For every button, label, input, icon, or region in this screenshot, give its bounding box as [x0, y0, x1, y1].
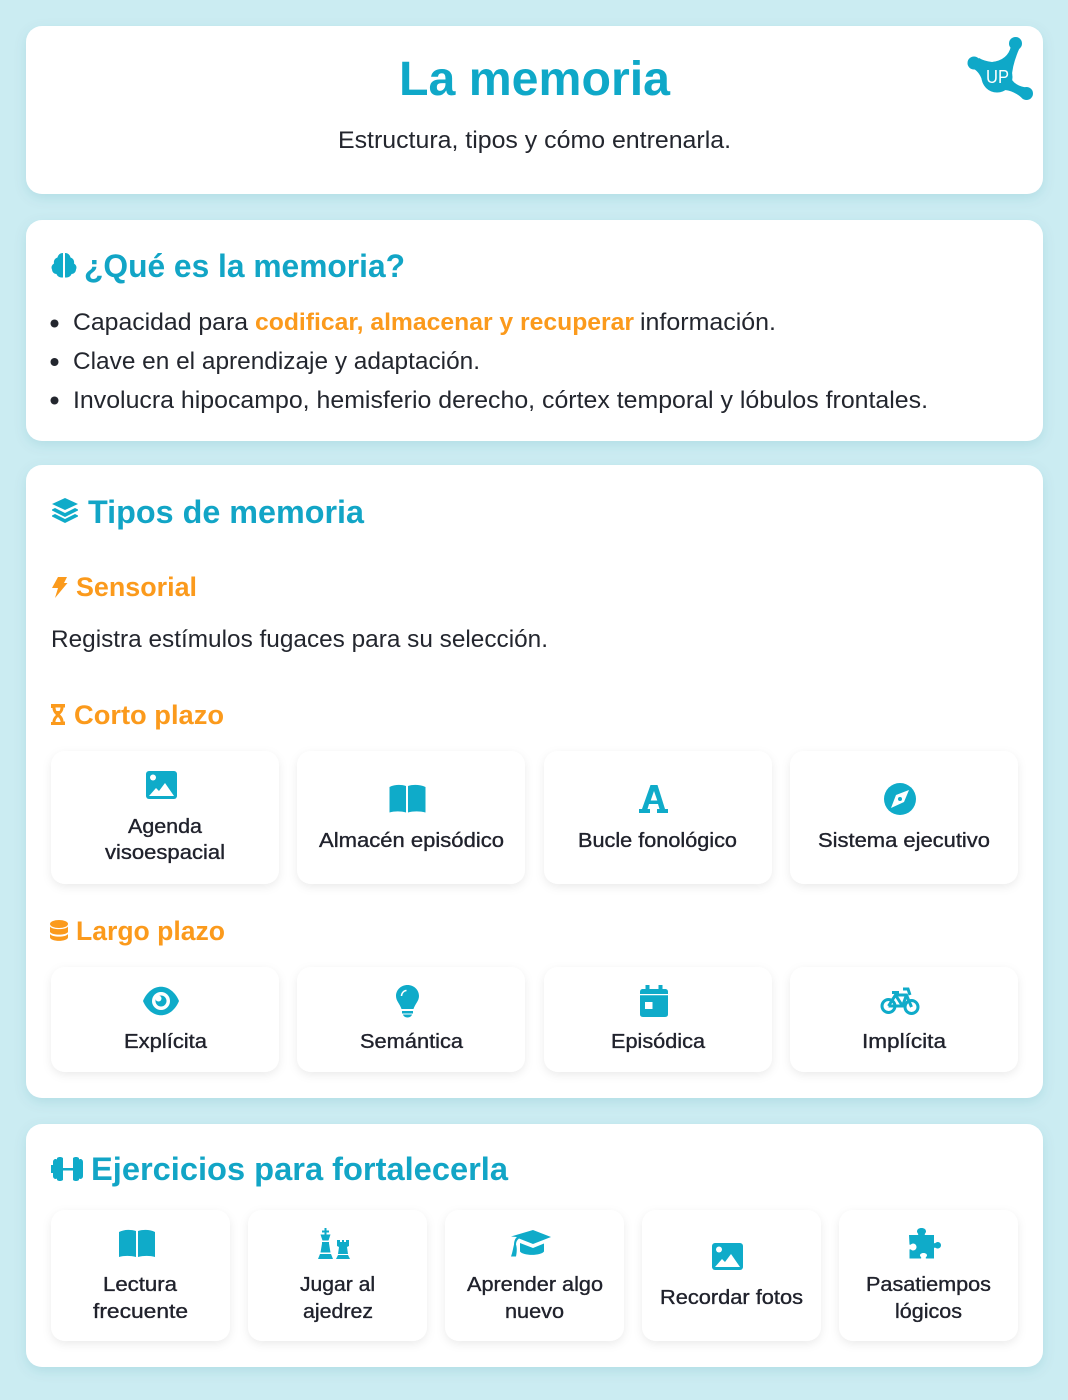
- card: bucle fonologico: Bucle fonológico: [578, 830, 737, 852]
- icon: bolt: [52, 577, 68, 598]
- icon: hourglass: [51, 704, 65, 725]
- card: almacen episodico: [297, 751, 525, 884]
- icon: chess pieces: [318, 1228, 350, 1259]
- icon: open book: [390, 785, 426, 812]
- bullet list: [50, 309, 928, 414]
- card: bucle fonologico: [544, 751, 772, 884]
- heading: exercises: Ejercicios para fortalecerla: [91, 1151, 508, 1187]
- card: sistema ejecutivo: [790, 751, 1018, 884]
- icon: layers: [52, 498, 78, 523]
- card: pasatiempos: Pasatiempos: [866, 1274, 991, 1296]
- icon: dumbbell: [51, 1157, 83, 1181]
- subheading: sensorial: Sensorial: [76, 572, 197, 602]
- card: recordar fotos: [642, 1210, 821, 1341]
- icon: image: [146, 771, 177, 799]
- card: aprender: [445, 1210, 624, 1341]
- card: episodica: [544, 967, 772, 1072]
- subtitle: Estructura, tipos y cómo entrenarla.: [338, 127, 731, 154]
- card: ajedrez: [248, 1210, 427, 1341]
- panel: header: [26, 26, 1043, 194]
- subheading: short term: Corto plazo: [74, 700, 224, 730]
- card: episodica: Episódica: [611, 1031, 706, 1053]
- icon: puzzle piece: [909, 1228, 941, 1258]
- card: lectura: frecuente: [93, 1301, 188, 1323]
- icon: open book: [119, 1230, 155, 1257]
- bullet list: Involucra hipocampo, hemisferio derecho, córtex temporal y lóbulos frontales.: [73, 387, 928, 414]
- card: recordar fotos: Recordar fotos: [660, 1287, 803, 1309]
- card: implicita: [790, 967, 1018, 1072]
- card: aprender: nuevo: [505, 1301, 564, 1323]
- icon: light bulb: [396, 985, 419, 1018]
- panel: types of memory: [26, 465, 1043, 1098]
- heading: types: Tipos de memoria: [88, 494, 364, 530]
- bullet list: Capacidad para: [73, 309, 249, 336]
- panel: exercises: [26, 1124, 1043, 1367]
- card: ajedrez: ajedrez: [303, 1301, 373, 1323]
- bullet list: Clave en el aprendizaje y adaptación.: [73, 348, 480, 375]
- panel: what is memory: [26, 220, 1043, 441]
- card: implicita: Implícita: [862, 1031, 947, 1053]
- card: agenda visoespacial: visoespacial: [105, 842, 225, 864]
- icon: letter A: [639, 785, 668, 813]
- card: agenda visoespacial: [51, 751, 279, 884]
- icon: brain: [52, 253, 76, 278]
- card: agenda visoespacial: Agenda: [128, 816, 203, 838]
- bullet list: información.: [640, 309, 776, 336]
- title: La memoria: [399, 53, 670, 106]
- card: lectura: [51, 1210, 230, 1341]
- icon: UP logo: UP: [986, 67, 1009, 87]
- heading: what is memory: ¿Qué es la memoria?: [84, 248, 405, 284]
- text: sensorial description: Registra estímulos fugaces para su selección.: [51, 626, 548, 653]
- icon: image: [712, 1243, 743, 1270]
- card: pasatiempos: lógicos: [895, 1301, 962, 1323]
- icon: graduation cap: [511, 1230, 551, 1256]
- card: sistema ejecutivo: Sistema ejecutivo: [818, 830, 990, 852]
- icon: compass: [884, 783, 916, 815]
- card: semantica: [297, 967, 525, 1072]
- card: aprender: Aprender algo: [467, 1274, 603, 1296]
- card: almacen episodico: Almacén episódico: [319, 830, 504, 852]
- icon: database: [50, 920, 68, 941]
- card: lectura: Lectura: [103, 1274, 178, 1296]
- card: semantica: Semántica: [360, 1031, 464, 1053]
- card: explicita: [51, 967, 279, 1072]
- icon: eye: [143, 987, 179, 1015]
- card: ajedrez: Jugar al: [300, 1274, 375, 1296]
- icon: calendar: [640, 985, 668, 1017]
- icon: UP logo: [968, 37, 1033, 100]
- bullet list: codificar, almacenar y recuperar: [255, 309, 634, 336]
- subheading: long term: Largo plazo: [76, 916, 225, 946]
- card: explicita: Explícita: [124, 1031, 208, 1053]
- card: pasatiempos: [839, 1210, 1018, 1341]
- icon: bicycle: [882, 989, 918, 1014]
